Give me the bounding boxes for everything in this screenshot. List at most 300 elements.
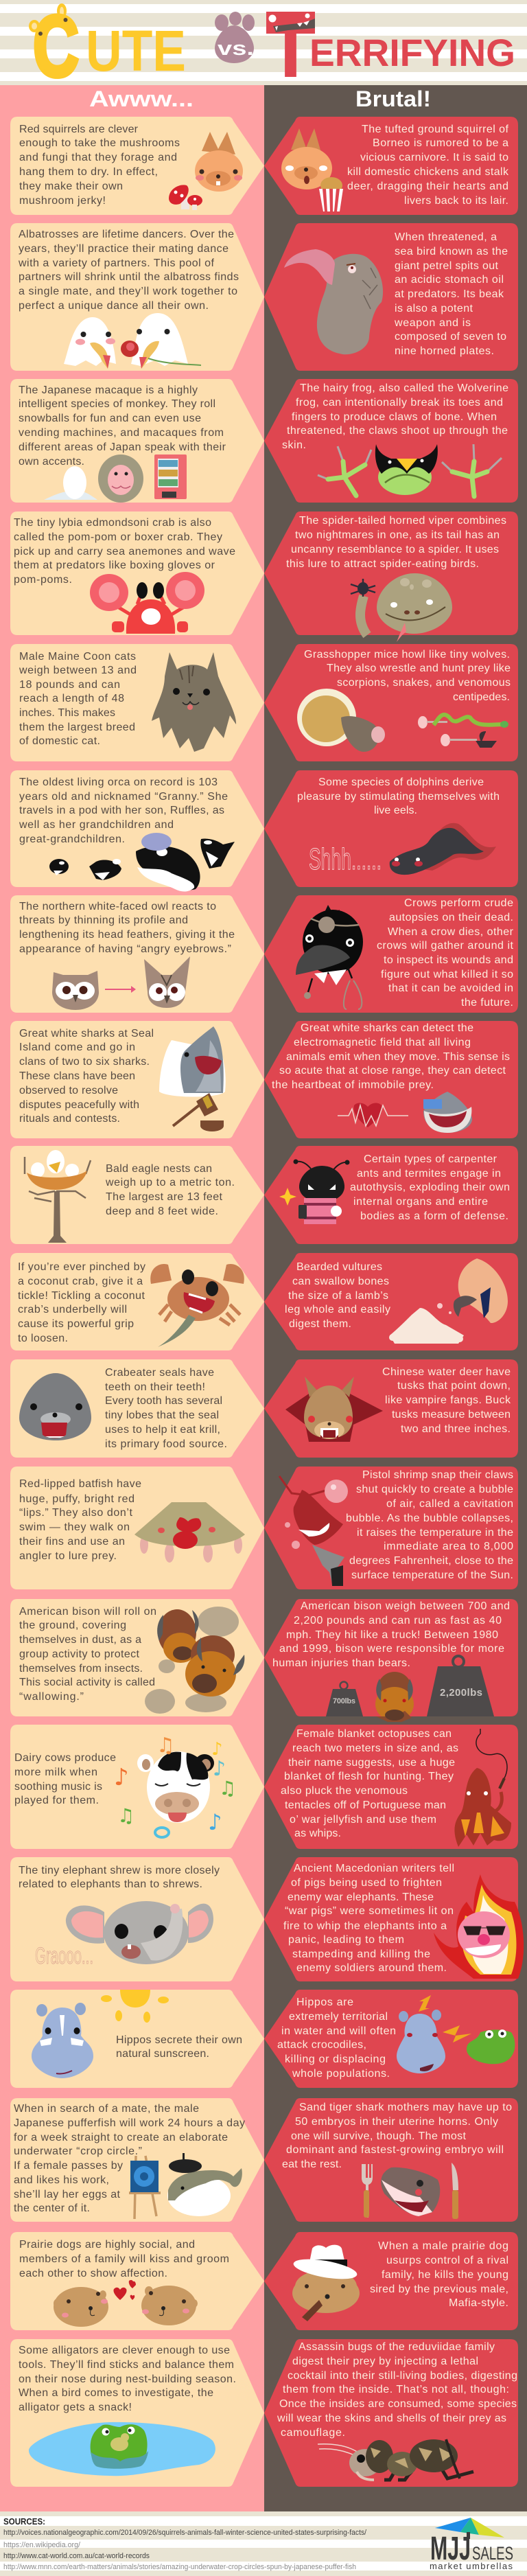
icon: blushing eel — [390, 823, 496, 875]
panel: Japanese pufferfish: Japanese pufferfish will work 24 hours a day — [14, 2117, 245, 2129]
panel: red squirrel cute — [10, 117, 264, 215]
icon: prairie dog with hat and cigar — [292, 2245, 360, 2321]
icon: squirrel and mushrooms — [169, 132, 243, 210]
panel: war pigs: of pigs being used to frighten — [291, 1877, 442, 1889]
panel: blanket octopus: reach two meters in size and, as — [292, 1743, 458, 1754]
panel: Japanese macaque: snowballs for fun and can even use — [19, 413, 201, 424]
panel: Japanese pufferfish: When in search of a mate, the male — [14, 2103, 199, 2115]
icon: octopus with whip — [454, 1729, 511, 1847]
panel: prairie dogs: each other to show affection. — [19, 2268, 167, 2279]
panel: boxer crab: called the pom-pom or boxer crab. They — [14, 531, 222, 543]
panel: dairy cows: played for them. — [14, 1795, 99, 1806]
panel: mafia prairie dog: usurps control of a rival — [386, 2255, 508, 2266]
panel: prairie dogs — [10, 2232, 264, 2330]
panel: hairy frog: threatened, the claws shoot up through the — [287, 425, 508, 437]
panel: Japanese macaque: intelligent species of monkey. They roll — [19, 398, 215, 410]
panel: blanket octopus: tentacles off of Portuguese man — [285, 1799, 446, 1811]
logo: MJJ Sales — [430, 2518, 513, 2571]
icon: cow listening to music — [114, 1734, 236, 1837]
panel: Japanese macaque: own accents. — [19, 456, 84, 468]
panel: hippo territorial: Hippos are — [296, 1997, 353, 2008]
panel: Japanese pufferfish — [10, 2098, 264, 2222]
panel: Chinese water deer: tusks that point down, — [397, 1380, 511, 1392]
icon: alligator in pond with bird — [29, 2422, 215, 2476]
panel: white-faced owl: appearance of having “angry eyebrows.” — [19, 943, 231, 955]
panel: red squirrel cute: hang them to dry. In effect, — [19, 166, 158, 178]
panel: giant petrel: composed of seven to — [395, 331, 506, 343]
icon: nest on tree — [25, 1150, 91, 1243]
panel: bearded vultures: leg whole and easily — [285, 1304, 390, 1315]
icon: angry squirrel with bucket — [281, 128, 343, 211]
panel: grasshopper mice: scorpions, snakes, and venomous — [337, 677, 511, 689]
panel: boxer crab: pick up and carry sea anemones and wave — [14, 546, 235, 557]
panel: pistol shrimp — [264, 1467, 518, 1589]
icon: orca family — [49, 833, 235, 892]
panel: Japanese pufferfish: and likes his work, — [14, 2174, 109, 2186]
icon: camouflaged assassin bug — [318, 2439, 473, 2480]
panel: white-faced owl: The northern white-faced owl reacts to — [19, 901, 216, 912]
panel: elephant shrew — [10, 1857, 264, 1981]
icon: elephant shrew head — [66, 1901, 213, 1964]
panel: dolphins and eels: live eels. — [374, 805, 417, 816]
panel: pistol shrimp: it raises the temperature in the — [357, 1527, 513, 1539]
panel: war pigs: enemy soldiers around them. — [296, 1962, 447, 1974]
panel: spider-tailed viper: two nightmares in one, as its tail has an — [295, 529, 500, 541]
footer band — [0, 2511, 527, 2576]
source links: http://voices.nationalgeographic.com/2014/09/26/squirrels-animals-fall-winter-science-united-states-surprising-facts/ — [3, 2529, 367, 2537]
panel: coconut crab: cause its powerful grip — [18, 1318, 134, 1330]
label: 2,200lbs: 2,200lbs — [440, 1687, 482, 1699]
panel: sand tiger sharks: one will survive, though. The most — [291, 2130, 467, 2142]
panel: American bison wallowing — [10, 1599, 264, 1716]
panel: bald eagle nests — [10, 1146, 264, 1244]
panel: coconut crab: tickle! Tickling a coconut — [18, 1290, 145, 1302]
panel: blanket octopus: also pluck the venomous — [281, 1785, 408, 1797]
panel: crow autopsy: Crows perform crude — [404, 897, 513, 909]
heading: sources: SOURCES: — [3, 2516, 45, 2527]
icon: music notes: ♪ — [208, 1809, 222, 1835]
icon: flaming war pig — [434, 1874, 524, 1979]
panel: white-faced owl — [10, 895, 264, 1013]
panel: blanket octopus: o’ war jellyfish and use them — [290, 1814, 436, 1826]
left column background — [0, 85, 264, 2511]
panel: Maine Coon: 18 pounds and can — [19, 679, 120, 691]
panel: war pigs: stampeding and killing the — [292, 1948, 430, 1960]
panel: albatross: partners will shrink until the albatross finds — [19, 271, 239, 283]
panel: giant petrel: at predators. Its beak — [395, 288, 504, 300]
icon: tickled coconut crab — [150, 1264, 244, 1347]
panel: shark electric sense: Great white sharks can detect the — [301, 1022, 473, 1034]
panel: mafia prairie dog: Mafia-style. — [449, 2297, 508, 2309]
icon: music notes: ♪ — [213, 1757, 226, 1781]
panel: boxer crab: The tiny lybia edmondsoni crab is also — [14, 517, 211, 529]
panel: American bison wallowing: This social activity is called — [19, 1677, 155, 1688]
panel: shark electric sense: electromagnetic field that all living — [294, 1037, 471, 1048]
panel: grasshopper mice: Grasshopper mice howl like tiny wolves. — [304, 649, 510, 660]
panel: crow autopsy: When a crow dies, other — [388, 926, 514, 938]
panel: white-faced owl: threats by thinning its profile and — [19, 915, 188, 926]
panel: mafia prairie dog — [264, 2232, 518, 2330]
panel: assassin bugs: them from the inside. That’s not all, though: — [283, 2384, 509, 2395]
panel: albatross: Albatrosses are lifetime dancers. Over the — [19, 229, 234, 240]
icon: ant with dynamite — [279, 1159, 350, 1224]
panel: American bison injuries: mph. They hit like a truck! Between 1980 — [286, 1629, 498, 1641]
panel: hippo territorial: in water and will often — [281, 2025, 396, 2037]
panel: tufted ground squirrel: Borneo is rumored to be a — [373, 137, 508, 149]
panel: orca: years old and nicknamed “Granny.” She — [19, 791, 228, 803]
title: Cute: UTE — [86, 19, 186, 83]
panel: American bison injuries: and 1999, bison were responsible for more — [279, 1643, 504, 1655]
panel: hippo territorial: attack crocodiles, — [277, 2039, 366, 2051]
panel: spider-tailed viper: uncanny resemblance to a spider. It uses — [291, 544, 499, 555]
panel: blanket octopus: as whips. — [294, 1828, 341, 1839]
icon: crab with pom-poms — [90, 572, 204, 634]
panel: great white clans — [10, 1021, 264, 1138]
title: vs paw — [215, 12, 255, 63]
panel: albatross: with a variety of partners. This pool of — [18, 257, 215, 269]
panel: bearded vultures — [264, 1253, 518, 1350]
panel: white-faced owl: lengthening its head feathers, giving it the — [19, 929, 235, 941]
panel: giant petrel: weapon and is — [394, 317, 471, 329]
panel: giant petrel: giant petrel spits out — [395, 260, 499, 272]
panel: shark electric sense: animals emit when they move. This sense is — [286, 1051, 510, 1063]
icon: batfish — [134, 1502, 245, 1563]
panel: tufted ground squirrel: deer, dragging their hearts and — [347, 181, 508, 192]
icon: heartbeat — [338, 1103, 408, 1127]
panel: crabeater seals: its primary food source. — [105, 1438, 227, 1450]
panel: boxer crab: them at predators like boxing gloves or — [14, 560, 215, 571]
panel: giant petrel: an acidic stomach oil — [395, 274, 504, 286]
panel: sand tiger sharks: eat the rest. — [282, 2159, 342, 2170]
panel: tufted ground squirrel: livers back to its lair. — [404, 195, 508, 207]
panel: red-lipped batfish: swim — they walk on — [19, 1521, 130, 1533]
panel: blanket octopus: their name suggests, use a huge — [288, 1757, 455, 1769]
panel: exploding ants: internal organs and entire — [353, 1196, 488, 1208]
title: Terrifying: ERRIFYING — [309, 31, 515, 74]
panel: crow autopsy: autopsies on their dead. — [389, 912, 513, 923]
panel: dairy cows — [10, 1725, 264, 1849]
heading: Awww: Awww... — [89, 87, 194, 111]
panel: war pigs: “war pigs” were sometimes lit on — [285, 1905, 454, 1917]
panel: hairy frog: frog, can intentionally break its toes and — [296, 397, 503, 409]
panel: dolphins and eels: pleasure by stimulating themselves with — [297, 791, 500, 803]
title: Terrifying — [266, 0, 515, 96]
panel: war pigs: fire to whip the elephants into a — [283, 1920, 447, 1932]
panel: boxer crab: pom-poms. — [14, 574, 72, 586]
panel: Chinese water deer: two and three inches. — [401, 1423, 511, 1435]
panel: prairie dogs: members of a family will kiss and groom — [19, 2253, 229, 2265]
panel: bald eagle nests: The largest are 13 feet — [106, 1191, 223, 1203]
panel: pistol shrimp: shut quickly to create a bubble — [356, 1484, 513, 1495]
icon: Maine Coon cat — [152, 652, 236, 752]
icon: hippo — [32, 2003, 93, 2078]
panel: alligators: When a bird comes to investigate, the — [19, 2387, 213, 2399]
panel: orca: well as her grandchildren and — [19, 819, 174, 831]
panel: grasshopper mice: They also wrestle and hunt prey like — [327, 663, 511, 674]
icon: calm owl — [52, 971, 99, 1010]
panel: assassin bugs: Once the insides are consumed, some species — [279, 2398, 517, 2410]
panel: Japanese macaque: different areas of Japan speak with their — [19, 441, 226, 453]
panel: hairy frog: fingers to produce claws of bone. When — [292, 411, 497, 423]
panel: crabeater seals: Crabeater seals have — [105, 1367, 214, 1379]
icon: music notes — [114, 1734, 236, 1837]
panel: alligators: tools. They’ll find sticks and balance them — [19, 2359, 234, 2371]
panel: red-lipped batfish: “lips.” They also don’t — [19, 1507, 133, 1519]
icon: music notes: ♫ — [117, 1804, 134, 1827]
panel: bearded vultures: digest them. — [289, 1318, 351, 1330]
title: Cute — [29, 0, 186, 95]
panel: red squirrel cute: they make their own — [19, 181, 123, 192]
panel: great white clans: observed to resolve — [19, 1085, 118, 1096]
icon: seal — [19, 1373, 91, 1440]
panel: pistol shrimp: of air, called a cavitation — [386, 1498, 513, 1510]
panel: red-lipped batfish: angler to lure prey. — [19, 1550, 117, 1562]
panel: dolphins and eels: Some species of dolphins derive — [318, 777, 484, 788]
icon: kissing prairie dogs and hearts — [54, 2280, 198, 2327]
panel: exploding ants: Certain types of carpenter — [364, 1153, 497, 1165]
panel: crabeater seals: tiny lobes that the seal — [105, 1410, 219, 1421]
panel: assassin bugs: camouflage. — [281, 2427, 345, 2439]
panel: sand tiger sharks: dominant and fastest-growing embryo will — [286, 2144, 504, 2156]
panel: American bison injuries: 2,200 pounds and can run as fast as 40 — [294, 1615, 502, 1626]
icon: plunger snake and scorpion — [418, 715, 508, 747]
panel: exploding ants: ants and termites engage in — [357, 1168, 501, 1180]
panel: coconut crab: a coconut crab, give it a — [18, 1276, 143, 1287]
panel: pistol shrimp: bubble. As the bubble collapses, — [346, 1513, 513, 1524]
panel: crabeater seals: Every tooth has several — [105, 1395, 222, 1407]
panel: blanket octopus — [264, 1725, 518, 1849]
panel: red squirrel cute: mushroom jerky! — [19, 195, 106, 207]
panel: hippo sunscreen: natural sunscreen. — [116, 2048, 209, 2060]
panel: great white clans: Island come and go in — [19, 1042, 135, 1053]
panel: alligators: on their nose during nest-building season. — [19, 2373, 236, 2385]
panel: crow autopsy: to inspect its wounds and — [384, 954, 513, 966]
panel: tufted ground squirrel — [264, 117, 518, 215]
panel: pistol shrimp: Pistol shrimp snap their claws — [362, 1469, 513, 1481]
panel: war pigs — [264, 1857, 524, 1981]
panel: American bison injuries: human injuries than bears. — [272, 1657, 410, 1669]
panel: assassin bugs: cocktail into their still-living bodies, digesting — [288, 2370, 517, 2382]
panel: pistol shrimp: immediate area to 8,000 — [384, 1541, 513, 1552]
panel: orca: travels in a pod with her son, Ruffles, as — [19, 805, 224, 816]
panel: great white clans: clans of two to six sharks. — [19, 1056, 150, 1068]
panel: hippo territorial: killing or displacing — [285, 2054, 386, 2065]
panel: dairy cows: more milk when — [14, 1767, 97, 1778]
panel: crow autopsy: figure out what killed it so — [381, 969, 513, 980]
panel: mafia prairie dog: sired by the previous male, — [370, 2284, 508, 2295]
source links: http://www.mnn.com/earth-matters/animals/stories/amazing-underwater-crop-circles-spun-by-japanese-puffer-fish — [3, 2563, 356, 2571]
panel: dolphins and eels — [264, 770, 518, 887]
icon: music notes: ♪ — [114, 1764, 129, 1791]
icon: vulture and bones — [389, 1258, 508, 1344]
arrow: owl transformation — [105, 986, 136, 993]
panel: prairie dogs: Prairie dogs are highly social, and — [19, 2239, 195, 2251]
panel: Japanese macaque — [10, 379, 264, 503]
panel: hippo territorial — [264, 1990, 518, 2088]
panel: red squirrel cute: and fungi that they forage and — [19, 152, 177, 163]
logo: MJJ Sales: MJJ — [430, 2531, 471, 2567]
panel: hairy frog — [264, 379, 518, 503]
panel: giant petrel: When threatened, a — [395, 231, 497, 243]
panel: Maine Coon: Male Maine Coon cats — [19, 651, 136, 663]
logo: MJJ Sales: market umbrellas — [430, 2561, 513, 2571]
panel: American bison injuries — [264, 1599, 518, 1722]
panel: hippo territorial: extremely territorial — [289, 2011, 388, 2023]
panel: sand tiger sharks: Sand tiger shark mothers may have up to — [299, 2102, 512, 2113]
heading: Brutal: Brutal! — [355, 87, 431, 111]
panel: elephant shrew: related to elephants than to shrews. — [19, 1878, 202, 1890]
panel: war pigs: Ancient Macedonian writers tell — [294, 1863, 454, 1874]
panel: alligators: alligator gets a snack! — [19, 2402, 132, 2413]
panel: crabeater seals: teeth on their teeth! — [105, 1381, 205, 1393]
header band — [0, 0, 527, 96]
icon: pufferfish artist at easel — [129, 2153, 242, 2219]
panel: bearded vultures: can swallow bones — [292, 1276, 389, 1287]
panel: bald eagle nests: deep and 8 feet wide. — [106, 1206, 218, 1217]
icon: petrel head — [284, 249, 383, 354]
icon: music notes: ♫ — [156, 1734, 175, 1758]
panel: blanket octopus: Female blanket octopuses can — [296, 1728, 452, 1740]
panel: crow autopsy: crows will gather around it — [377, 940, 514, 952]
icon: albatross pair with rose — [64, 313, 201, 369]
panel: assassin bugs: digest their prey by injecting a lethal — [292, 2356, 478, 2367]
panel: bearded vultures: the size of a lamb’s — [288, 1290, 388, 1302]
panel: hippo sunscreen: Hippos secrete their own — [116, 2034, 242, 2046]
panel: tufted ground squirrel: vicious carnivore. It is said to — [360, 152, 508, 163]
panel: crow autopsy: that it can be avoided in — [388, 982, 513, 994]
panel: shark electric sense — [264, 1021, 518, 1138]
panel: grasshopper mice — [264, 644, 518, 761]
text: Graooo: Graooo... — [35, 1943, 93, 1969]
panel: crow autopsy — [264, 895, 518, 1013]
panel: mafia prairie dog: family, he kills the young — [382, 2269, 508, 2281]
panel: red squirrel cute: enough to take the mushrooms — [19, 137, 180, 149]
panel: giant petrel: is also a potent — [395, 303, 473, 314]
panel: grasshopper mice: centipedes. — [453, 691, 510, 703]
icon: shark embryo with cutlery — [362, 2163, 458, 2219]
panel: American bison injuries: American bison weigh between 700 and — [301, 1600, 510, 1612]
panel: orca: great-grandchildren. — [19, 833, 125, 845]
title: vs paw: vs. — [218, 38, 254, 60]
panel: American bison wallowing: “wallowing.” — [19, 1691, 84, 1703]
panel: alligators: Some alligators are clever enough to use — [19, 2345, 230, 2356]
panel: Japanese pufferfish: underwater “crop circle.” — [14, 2146, 142, 2157]
panel: orca: The oldest living orca on record is 103 — [19, 777, 218, 788]
panel: Japanese pufferfish: If a female passes by — [14, 2160, 123, 2172]
panel: great white clans: rituals and contests. — [19, 1113, 120, 1125]
icon: sun — [101, 1990, 169, 2023]
panel: dairy cows: Dairy cows produce — [14, 1752, 116, 1764]
panel: red-lipped batfish — [10, 1467, 264, 1589]
panel: red squirrel cute: Red squirrels are clever — [19, 124, 139, 135]
panel: sand tiger sharks — [264, 2098, 518, 2222]
panel: Japanese pufferfish: the center of it. — [14, 2203, 90, 2214]
title: Cute: C — [33, 0, 79, 95]
panel: spider-tailed viper — [264, 511, 518, 642]
panel: Maine Coon: them the largest breed — [19, 722, 135, 733]
panel: Chinese water deer: like vampire fangs. Buck — [385, 1394, 511, 1406]
panel: alligators — [10, 2339, 264, 2487]
panel: giant petrel: sea bird known as the — [395, 246, 508, 257]
panel: albatross — [10, 223, 264, 371]
panel: assassin bugs — [264, 2339, 518, 2487]
panel: coconut crab: to loosen. — [18, 1333, 68, 1344]
source links: http://www.cat-world.com.au/cat-world-records — [3, 2552, 150, 2560]
icon: shrimp with pistol — [279, 1476, 348, 1586]
panel: crabeater seals: uses to help it eat krill, — [105, 1424, 220, 1436]
panel: great white clans: These clans have been — [19, 1070, 135, 1082]
panel: Japanese pufferfish: she’ll lay her eggs at — [14, 2189, 121, 2200]
panel: albatross: perfect a unique dance all their own. — [19, 300, 209, 312]
icon: macaque, snowball and vending machine — [44, 455, 187, 503]
panel: Chinese water deer: tusks measure between — [392, 1409, 511, 1421]
icon: vampire deer — [285, 1377, 383, 1442]
panel: Japanese macaque: vending machines, and macaques from — [19, 427, 224, 439]
panel: shark electric sense: so acute that at close range, they can detect — [279, 1065, 506, 1077]
panel: red-lipped batfish: their fins and use an — [19, 1536, 125, 1548]
panel: American bison wallowing: American bison will roll on — [19, 1606, 156, 1618]
panel: Maine Coon: reach a length of 48 — [19, 693, 124, 704]
panel: Maine Coon: of domestic cat. — [19, 735, 100, 747]
icon: viper with spider tail — [351, 573, 452, 642]
icon: wallowing bison — [145, 1607, 244, 1714]
source links: https://en.wikipedia.org/ — [3, 2541, 81, 2549]
panel: hippo territorial: whole populations. — [292, 2068, 390, 2080]
panel: assassin bugs: will wear the skins and shells of their prey as — [277, 2413, 506, 2424]
panel: red-lipped batfish: Red-lipped batfish have — [19, 1478, 141, 1490]
panel: pistol shrimp: surface temperature of the Sun. — [351, 1569, 513, 1581]
panel: American bison wallowing: themselves in dust, as a — [19, 1634, 141, 1646]
panel: albatross: a single mate, and they’ll work together to — [19, 286, 237, 297]
icon: howling mouse and moon — [297, 689, 385, 752]
panel: hairy frog: The hairy frog, also called the Wolverine — [300, 382, 508, 394]
panel: sand tiger sharks: 50 embryos in their uterine horns. Only — [295, 2116, 498, 2128]
icon: shark with sensor visor — [423, 1092, 472, 1133]
panel: dairy cows: soothing music is — [14, 1781, 102, 1793]
panel: Japanese pufferfish: for a week straight to create an elaborate — [14, 2132, 228, 2143]
panel: coconut crab: crab’s underbelly will — [18, 1304, 127, 1315]
icon: weights and bison — [326, 1656, 494, 1722]
panel: spider-tailed viper: The spider-tailed horned viper combines — [299, 515, 506, 527]
panel: Maine Coon — [10, 644, 264, 761]
panel: elephant shrew: The tiny elephant shrew is more closely — [19, 1865, 220, 1876]
panel: Chinese water deer — [264, 1359, 518, 1458]
panel: hairy frog: skin. — [282, 439, 306, 451]
panel: war pigs: enemy war elephants. These — [288, 1891, 434, 1903]
panel: boxer crab — [10, 511, 264, 635]
panel: tufted ground squirrel: kill domestic chickens and stalk — [347, 166, 509, 178]
text: Shhh: Shhh...... — [309, 842, 382, 876]
panel: albatross: years, they’ll practice their mating dance — [19, 243, 229, 255]
icon: judge shark and gavel — [159, 1026, 226, 1131]
panel: red-lipped batfish: huge, puffy, bright red — [19, 1493, 134, 1505]
panel: hippo sunscreen — [10, 1990, 264, 2088]
icon: angry hippo and crocodile — [397, 1995, 515, 2073]
panel: giant petrel — [264, 223, 518, 371]
panel: exploding ants — [264, 1146, 518, 1244]
icon: angry owl — [144, 956, 190, 1008]
panel: American bison wallowing: the ground, covering — [19, 1620, 126, 1631]
panel: Maine Coon: weigh between 13 and — [19, 665, 137, 676]
panel: Chinese water deer: Chinese water deer have — [382, 1366, 511, 1378]
panel: exploding ants: autothysis, exploding their own — [350, 1182, 510, 1193]
panel: crabeater seals — [10, 1359, 264, 1458]
panel: spider-tailed viper: this lure to attract spider-eating birds. — [286, 558, 479, 570]
label: 700lbs: 700lbs — [333, 1697, 355, 1705]
icon: wolverine frog and claws — [318, 444, 502, 496]
panel: great white clans: Great white sharks at Seal — [19, 1028, 154, 1039]
panel: American bison wallowing: group activity to protect — [19, 1648, 140, 1660]
